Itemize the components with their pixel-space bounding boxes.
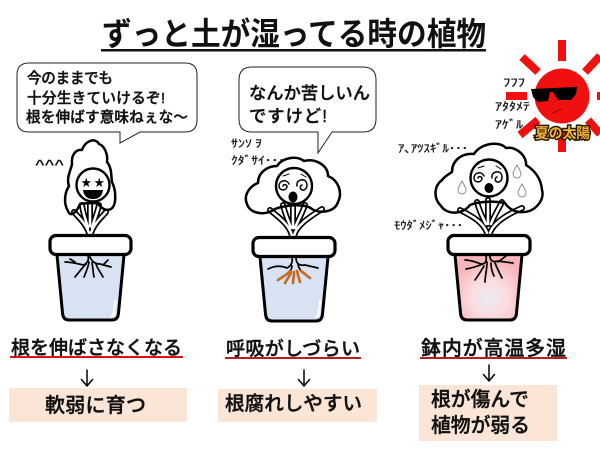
panel: right plant [394, 40, 600, 320]
plant: tall leaves with star-eyed face [65, 140, 115, 233]
arrow [484, 365, 494, 381]
heading: hard to breathe: 呼吸がしづらい [226, 338, 360, 360]
speech bubble: left: 今のままでも [27, 70, 113, 87]
caption: sun taunt: ﾌﾌﾌ [503, 74, 525, 90]
pot: right [448, 236, 530, 320]
arrow [82, 370, 92, 386]
panel: middle plant [231, 67, 376, 321]
caption: sun taunt: ｱｹﾞﾙ [495, 116, 524, 132]
speech bubble: left: 根を伸ばす意味ねぇな〜 [26, 109, 188, 126]
caption: hum: ^^^ [35, 157, 65, 172]
arrow [298, 370, 310, 386]
caption: sun taunt: ｱﾀﾀﾒﾃ [495, 98, 530, 114]
title: ずっと土が湿ってる時の植物 [102, 16, 486, 52]
heading: hot and humid: 鉢内が高温多湿 [421, 337, 566, 360]
caption: summer sun: 夏の太陽 [535, 125, 590, 141]
result box: 根腐れしやすい [225, 393, 362, 415]
plant: bushy leaves with sweating face [435, 144, 543, 233]
caption: sun taunt [495, 74, 530, 132]
speech bubble: left [17, 63, 197, 143]
speech bubble: middle: ですけど! [249, 106, 327, 126]
speech bubble: middle [239, 67, 376, 153]
icon: sun with sunglasses [506, 40, 600, 152]
caption: too hot: ｱ､ｱﾂｽｷﾞﾙ･･･ [398, 140, 468, 156]
column: right result [419, 337, 567, 441]
result box [9, 388, 187, 422]
caption: oxygen please: ｻﾝｿ ｦ [231, 135, 262, 151]
column: middle result [218, 338, 377, 422]
plant: tall leaves with star-eyed face: ★ [94, 177, 105, 189]
pot: left [50, 236, 131, 320]
column: left result [9, 337, 187, 422]
caption: oxygen please [231, 135, 285, 168]
pot: middle [253, 238, 335, 321]
speech bubble: middle: なんか苦しいん [249, 83, 370, 103]
caption: oxygen please: ｸﾀﾞｻｲ･･･ [231, 152, 285, 168]
heading: stops growing roots: 根を伸ばさなくなる [11, 337, 182, 359]
panel: left plant [17, 63, 197, 320]
plant: bushy leaves with dizzy face [246, 158, 340, 236]
result box: 軟弱に育つ [45, 394, 146, 417]
plant: tall leaves with star-eyed face: ★ [81, 177, 92, 189]
result box: 根が傷んで [431, 389, 529, 411]
caption: it is no use: ﾓｳﾀﾞﾒｼﾞｬ･･･ [394, 217, 463, 233]
result box [419, 385, 557, 441]
speech bubble: left: 十分生きていけるぞ! [27, 90, 165, 107]
result box [218, 389, 377, 422]
result box: 植物が弱る [431, 415, 530, 437]
